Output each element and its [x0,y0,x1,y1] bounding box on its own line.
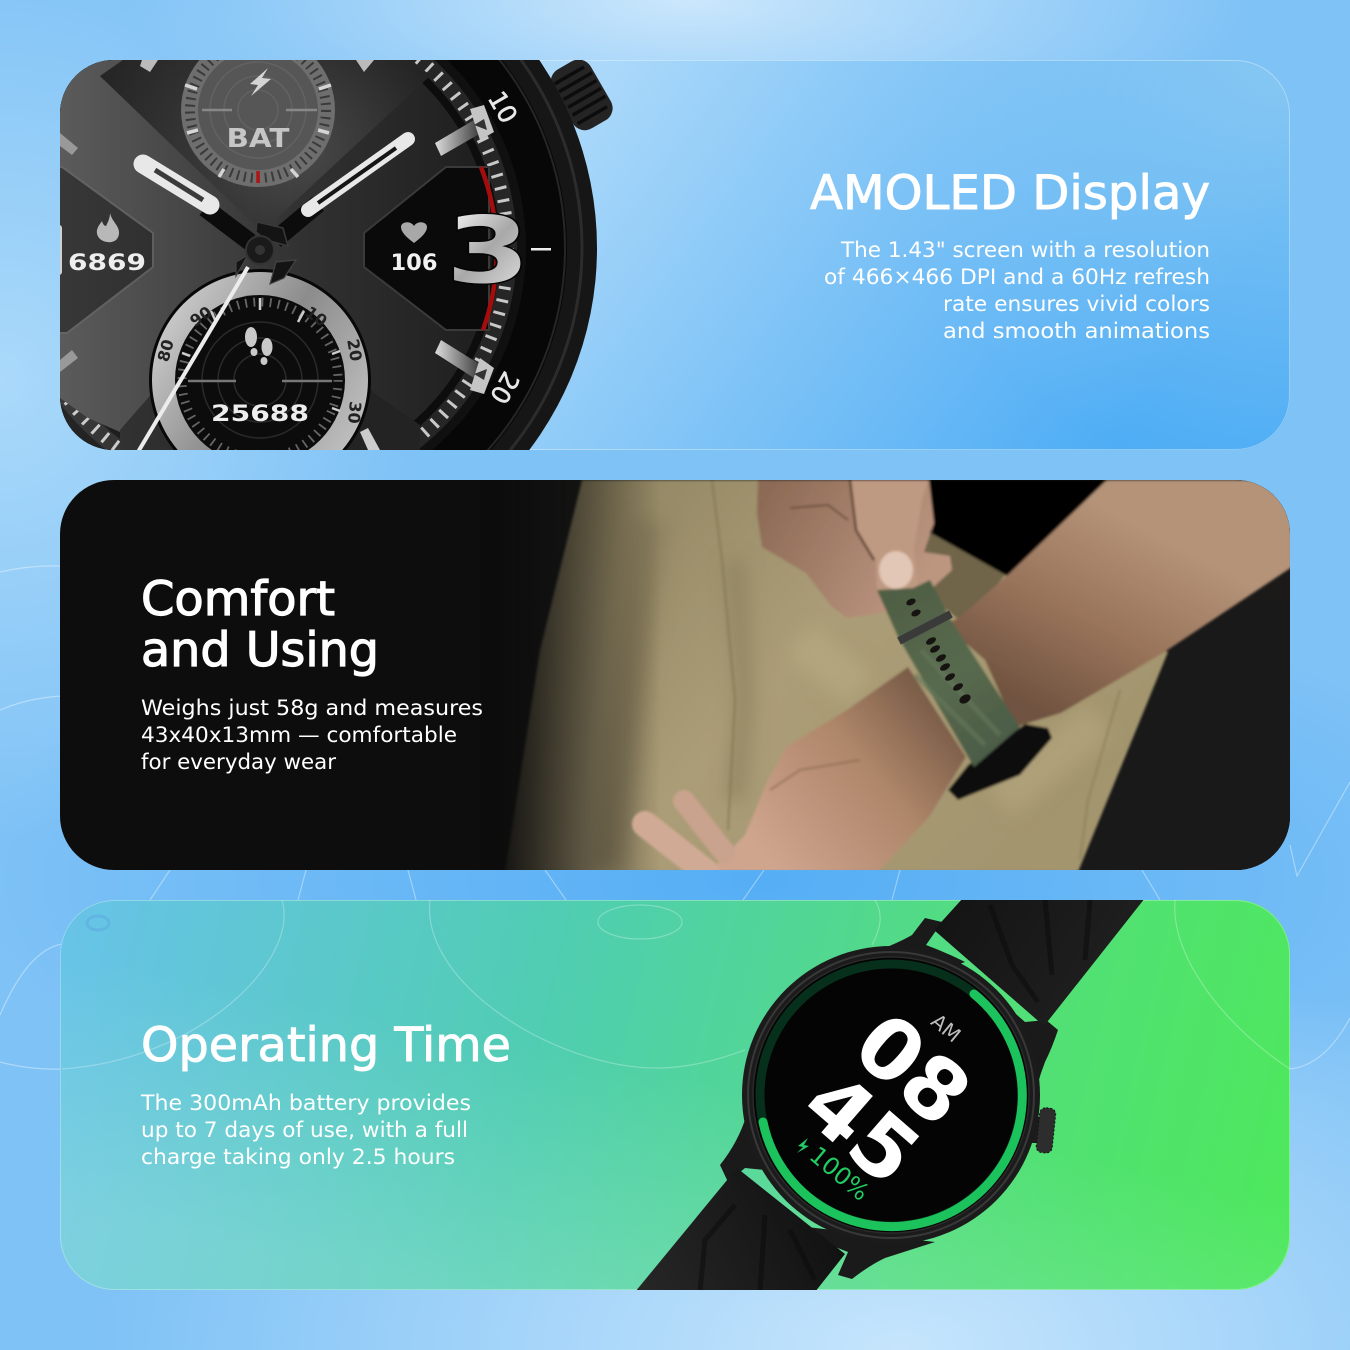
watch face close-up [60,60,613,450]
icon: footprints [245,327,272,365]
forearm [945,480,1292,727]
subdial: steps: 80 [154,337,178,364]
watch product shot [635,898,1145,1292]
text block: comfort description [141,696,483,775]
text block: battery description: up to 7 days of use, with a full [141,1118,468,1143]
panel: operating time [60,898,1290,1292]
text block: display description [824,238,1210,344]
watch hands [138,139,408,452]
right hexagon panel [364,167,489,330]
label: AM: AM [926,1009,966,1047]
text block: comfort description: for everyday wear [141,750,336,775]
subdial: steps: 10 [302,302,331,331]
left hexagon panel [50,167,153,333]
text block: display description: of 466×466 DPI and a 60Hz refresh [824,265,1210,290]
bezel numbers [488,91,520,403]
text block: display description: and smooth animations [943,319,1210,344]
photo: hands adjusting strap [480,480,1300,880]
label: step count: 25688 [211,402,309,427]
icon: heart [401,222,427,243]
lower hand [709,667,966,872]
subdial: steps: 30 [344,401,365,424]
dial dark sectors [100,55,431,460]
icon: charging bolt [797,1138,809,1153]
hour markers [60,60,494,450]
heading: comfort and using [141,572,379,678]
time: minute: 45 [785,1053,938,1204]
bezel numbers: 10 [482,86,523,128]
watch lugs [720,918,1058,1279]
label: battery percent: 100% [804,1141,875,1207]
text block: comfort description: Weighs just 58g and measures [141,696,483,721]
fingers [645,801,724,872]
dial left band fill [60,60,122,432]
lower strap [635,1168,845,1292]
battery ring track [760,964,1022,1226]
time: hour: 08 [836,994,989,1145]
label: BAT: BAT [226,124,290,154]
heading: operating time: Operating Time [141,1018,511,1073]
label: calories: 6869 [68,251,146,276]
green strap [877,580,1020,767]
strap holes [905,597,972,705]
watch crown [551,60,613,130]
upper hand [757,480,952,618]
icon: flame [97,213,119,242]
subdial: battery [181,60,335,187]
strap keeper [899,614,951,641]
text block: display description: rate ensures vivid colors [943,292,1210,317]
text block: display description: The 1.43" screen with a resolution [840,238,1210,263]
text block: battery description [140,1091,471,1170]
heading: AMOLED Display: AMOLED Display [810,166,1210,221]
icon: lightning bolt [250,68,271,96]
bezel numbers: 20 [484,367,525,409]
trousers [505,480,1168,872]
crown [1030,1107,1056,1154]
subdial: steps [149,269,371,450]
text block: battery description: The 300mAh battery provides [140,1091,471,1116]
text block: comfort description: 43x40x13mm — comfortable [141,723,457,748]
label: heart rate: 106 [390,251,438,276]
heading: comfort and using: and Using [141,623,379,678]
battery ring progress [763,994,1022,1227]
subdial: steps: 20 [343,337,366,363]
panel: AMOLED display [60,60,1290,450]
panel: comfort and using [60,480,1300,880]
red arc gauge [481,167,497,330]
numeral three: 3 [446,197,530,304]
watch lug [948,724,1052,800]
watch case [742,946,1040,1244]
subdial: steps: 90 [186,302,215,331]
text block: battery description: charge taking only 2.5 hours [141,1145,455,1170]
heading: comfort and using: Comfort [141,572,335,627]
upper strap [934,898,1145,1026]
